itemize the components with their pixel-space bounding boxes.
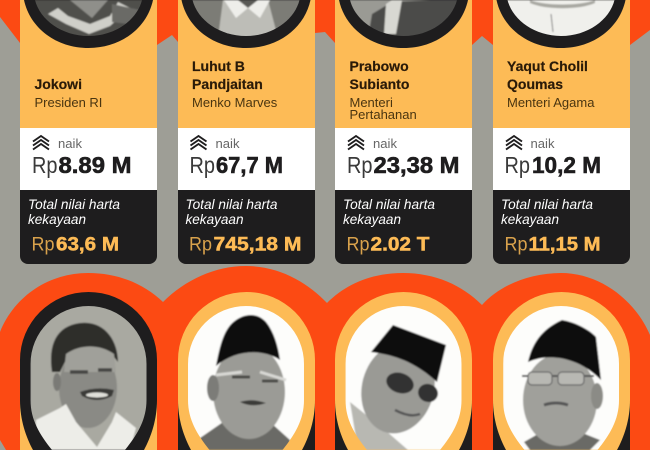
name: Jokowi bbox=[34, 76, 82, 92]
icon: up chevrons bbox=[506, 136, 522, 150]
icon: up chevrons bbox=[33, 136, 49, 150]
portrait: bottom row person 3 bbox=[335, 292, 472, 450]
card: Yaqut Cholil Qoumas: 10,2 M bbox=[532, 152, 601, 178]
total value: Rp bbox=[346, 234, 370, 256]
name: Prabowo bbox=[350, 58, 409, 74]
increase label: naik bbox=[58, 136, 82, 151]
card: Yaqut Cholil Qoumas: 11,15 M bbox=[528, 234, 600, 256]
role: Menteri Agama bbox=[507, 95, 595, 110]
orange backdrop: bottom row bbox=[0, 266, 650, 450]
increase value: Rp bbox=[190, 152, 215, 178]
portrait ring bbox=[24, 0, 153, 48]
card body bbox=[335, 0, 472, 264]
card: Jokowi: 63,6 M bbox=[56, 234, 119, 256]
card: Prabowo Subianto: 2.02 T bbox=[370, 234, 430, 256]
card: Yaqut Cholil Qoumas: kekayaan bbox=[501, 211, 559, 227]
increase label: naik bbox=[530, 136, 555, 151]
increase value: Rp bbox=[504, 152, 530, 178]
increase label: naik bbox=[373, 136, 397, 151]
card: Luhut B Pandjaitan: kekayaan bbox=[186, 211, 244, 227]
total label: Total nilai harta bbox=[343, 196, 435, 212]
card body bbox=[493, 0, 630, 264]
total value: Rp bbox=[32, 234, 54, 256]
increase label: naik bbox=[216, 136, 240, 151]
total label: Total nilai harta bbox=[28, 196, 120, 212]
total value: Rp bbox=[189, 234, 212, 256]
increase value: Rp bbox=[347, 152, 372, 178]
portrait: bottom row person 1 bbox=[20, 292, 157, 450]
total label: Total nilai harta bbox=[501, 196, 593, 212]
icon: up chevrons bbox=[348, 136, 364, 150]
icon: up chevrons bbox=[190, 136, 206, 150]
card body bbox=[20, 0, 157, 264]
portrait photo bbox=[508, 0, 614, 36]
role: Presiden RI bbox=[34, 95, 102, 110]
card: Jokowi bbox=[20, 0, 157, 264]
card: Jokowi: 8.89 M bbox=[58, 152, 132, 178]
orange backdrop: top row bbox=[0, 0, 650, 45]
card: Luhut B Pandjaitan bbox=[178, 0, 315, 264]
card: Luhut B Pandjaitan: Pandjaitan bbox=[192, 76, 263, 92]
portrait: bottom row person 2 bbox=[178, 292, 315, 450]
portrait ring bbox=[496, 0, 626, 48]
card: Prabowo Subianto: Pertahanan bbox=[350, 107, 417, 122]
card: Prabowo Subianto: Subianto bbox=[350, 76, 409, 92]
card: Prabowo Subianto: 23,38 M bbox=[374, 152, 460, 178]
card body bbox=[178, 0, 315, 264]
role: Menko Marves bbox=[192, 95, 278, 110]
card: Yaqut Cholil Qoumas: Qoumas bbox=[507, 76, 563, 92]
card: Prabowo Subianto bbox=[335, 0, 472, 264]
portrait: bottom row person 4 bbox=[493, 292, 630, 450]
card: Jokowi: kekayaan bbox=[28, 211, 86, 227]
portrait photo bbox=[192, 0, 300, 36]
name: Luhut B bbox=[192, 58, 245, 74]
card: Prabowo Subianto: kekayaan bbox=[343, 211, 401, 227]
total label: Total nilai harta bbox=[186, 196, 278, 212]
total value: Rp bbox=[504, 234, 528, 256]
card: Luhut B Pandjaitan: 745,18 M bbox=[214, 234, 302, 256]
portrait photo bbox=[35, 0, 142, 36]
increase value: Rp bbox=[32, 152, 58, 178]
card: Luhut B Pandjaitan: 67,7 M bbox=[216, 152, 283, 178]
portrait photo bbox=[350, 0, 457, 36]
portrait ring bbox=[339, 0, 468, 48]
portrait ring bbox=[182, 0, 310, 48]
role: Menteri bbox=[350, 95, 393, 110]
card: Yaqut Cholil Qoumas bbox=[493, 0, 630, 264]
name: Yaqut Cholil bbox=[507, 58, 588, 74]
